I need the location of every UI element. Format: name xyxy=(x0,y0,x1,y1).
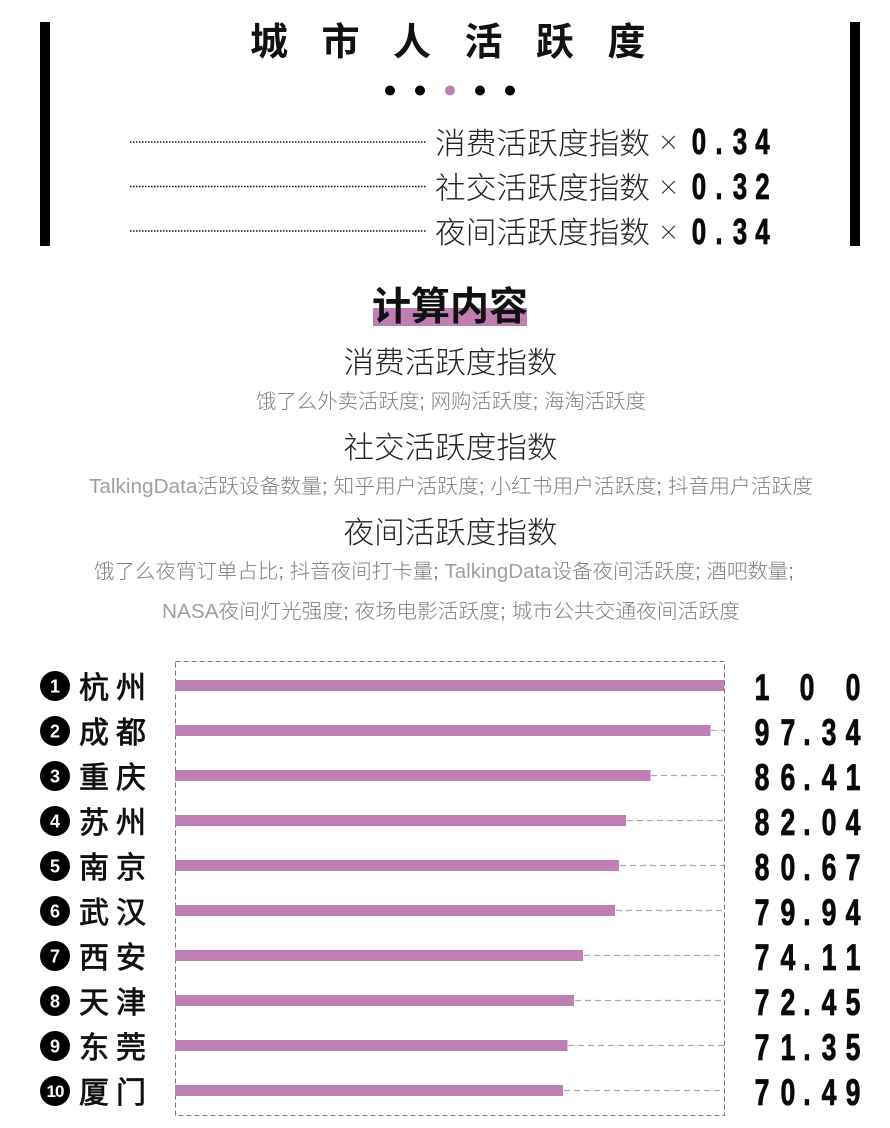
row 10: 10 xyxy=(47,1082,64,1101)
row 7: 74.11 xyxy=(755,937,860,978)
night index heading: 夜间活跃度指数 xyxy=(344,517,558,550)
row 1: 100 xyxy=(755,667,860,708)
row 2: 97.34 xyxy=(755,712,860,753)
row 2: 2 xyxy=(50,722,60,742)
row 5 xyxy=(40,847,860,888)
formula row: night xyxy=(130,212,770,252)
row 8: 天津 xyxy=(79,987,146,1020)
formula row: social: 0.32 xyxy=(692,167,770,207)
row 7: 7 xyxy=(50,946,60,966)
social index heading: 社交活跃度指数 xyxy=(344,432,558,465)
row 4 xyxy=(40,802,860,843)
night index detail line 2: NASA夜间灯光强度; 夜场电影活跃度; 城市公共交通夜间活跃度 xyxy=(162,600,740,623)
row 4: 苏州 xyxy=(79,807,146,840)
row 9: 71.35 xyxy=(755,1027,860,1068)
row 3: 3 xyxy=(50,766,60,786)
row 6: 79.94 xyxy=(755,892,860,933)
panel: calculation contents xyxy=(89,286,813,623)
consumption index heading: 消费活跃度指数 xyxy=(344,347,558,380)
row 7: 西安 xyxy=(79,942,146,975)
row 6 xyxy=(40,892,860,933)
row 5: 5 xyxy=(50,856,60,876)
row 9: 东莞 xyxy=(79,1032,146,1065)
row 2: 成都 xyxy=(79,717,146,750)
row 10: 厦门 xyxy=(79,1077,146,1110)
formula row: consumption: 0.34 xyxy=(692,122,770,162)
social index detail: TalkingData活跃设备数量; 知乎用户活跃度; 小红书用户活跃度; 抖音用户活跃度 xyxy=(89,475,813,498)
row 7 xyxy=(40,937,860,978)
right black bar xyxy=(850,22,860,246)
formula row: social: 社交活跃度指数 xyxy=(435,172,650,206)
formula row: night: 0.34 xyxy=(692,212,770,252)
row 3: 重庆 xyxy=(79,762,146,795)
row 3: 86.41 xyxy=(755,757,860,798)
row 4: 4 xyxy=(50,812,60,832)
row 6: 6 xyxy=(50,902,60,922)
row 3 xyxy=(40,757,860,798)
row 8 xyxy=(40,982,860,1023)
dots xyxy=(385,86,515,96)
row 1: 杭州 xyxy=(79,672,146,705)
left black bar xyxy=(40,22,50,246)
night index detail line 1: 饿了么夜宵订单占比; 抖音夜间打卡量; TalkingData设备夜间活跃度; 酒吧数量; xyxy=(94,560,794,583)
formula row: consumption xyxy=(130,122,770,162)
row 10: 70.49 xyxy=(755,1072,860,1113)
formula row: consumption: × xyxy=(658,127,679,157)
chart dashed frame xyxy=(176,662,724,1116)
row 5: 南京 xyxy=(79,852,146,885)
row 8: 72.45 xyxy=(755,982,860,1023)
row 4: 82.04 xyxy=(755,802,860,843)
formula row: night: × xyxy=(658,217,679,247)
formula row: social: × xyxy=(658,172,679,202)
consumption index detail: 饿了么外卖活跃度; 网购活跃度; 海淘活跃度 xyxy=(256,390,646,413)
row 8: 8 xyxy=(50,992,60,1012)
row 2 xyxy=(40,712,860,753)
row 10 xyxy=(40,1072,860,1113)
bar chart: city ranking xyxy=(40,662,860,1116)
heading highlight xyxy=(373,308,527,326)
heading: 计算内容 xyxy=(372,286,528,329)
panel: formula header xyxy=(40,22,860,252)
row 5: 80.67 xyxy=(755,847,860,888)
title: 城市人活跃度 xyxy=(250,22,646,64)
formula row: social xyxy=(130,167,770,207)
row 9: 9 xyxy=(50,1036,60,1056)
row 6: 武汉 xyxy=(79,897,146,930)
row 9 xyxy=(40,1027,860,1068)
formula row: consumption: 消费活跃度指数 xyxy=(435,128,650,161)
row 1 xyxy=(40,667,860,708)
row 1: 1 xyxy=(50,676,60,696)
formula row: night: 夜间活跃度指数 xyxy=(435,217,650,250)
